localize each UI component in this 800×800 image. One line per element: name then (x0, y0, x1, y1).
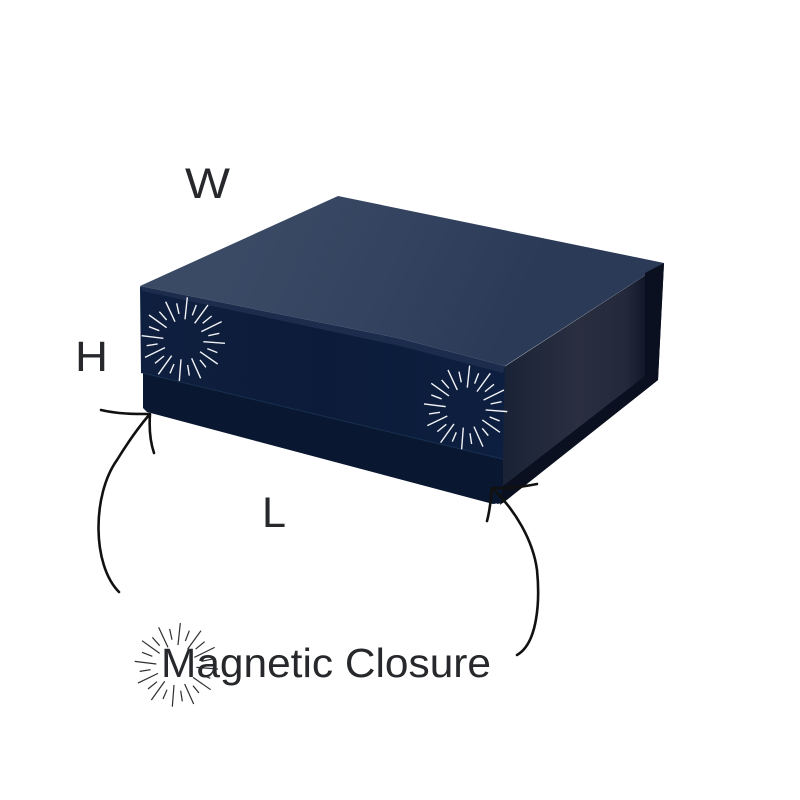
label: width: W (185, 160, 230, 208)
arrow: right closure pointer (487, 484, 538, 655)
box front lid (140, 287, 505, 460)
lid top edge band (140, 286, 505, 373)
box front lower base (143, 372, 503, 504)
lid lower seam (143, 373, 503, 459)
icon: white burst right (424, 366, 507, 449)
box right side with spine (497, 263, 664, 505)
label: length: L (262, 489, 286, 537)
box top face (140, 196, 664, 366)
product: navy gift box (140, 196, 664, 505)
icon: dark burst behind label (135, 623, 218, 707)
label: height: H (75, 333, 108, 381)
icon: white burst left (142, 297, 225, 381)
label: magnetic closure: Magnetic Closure (161, 640, 491, 686)
arrow: left closure pointer (98, 410, 154, 592)
